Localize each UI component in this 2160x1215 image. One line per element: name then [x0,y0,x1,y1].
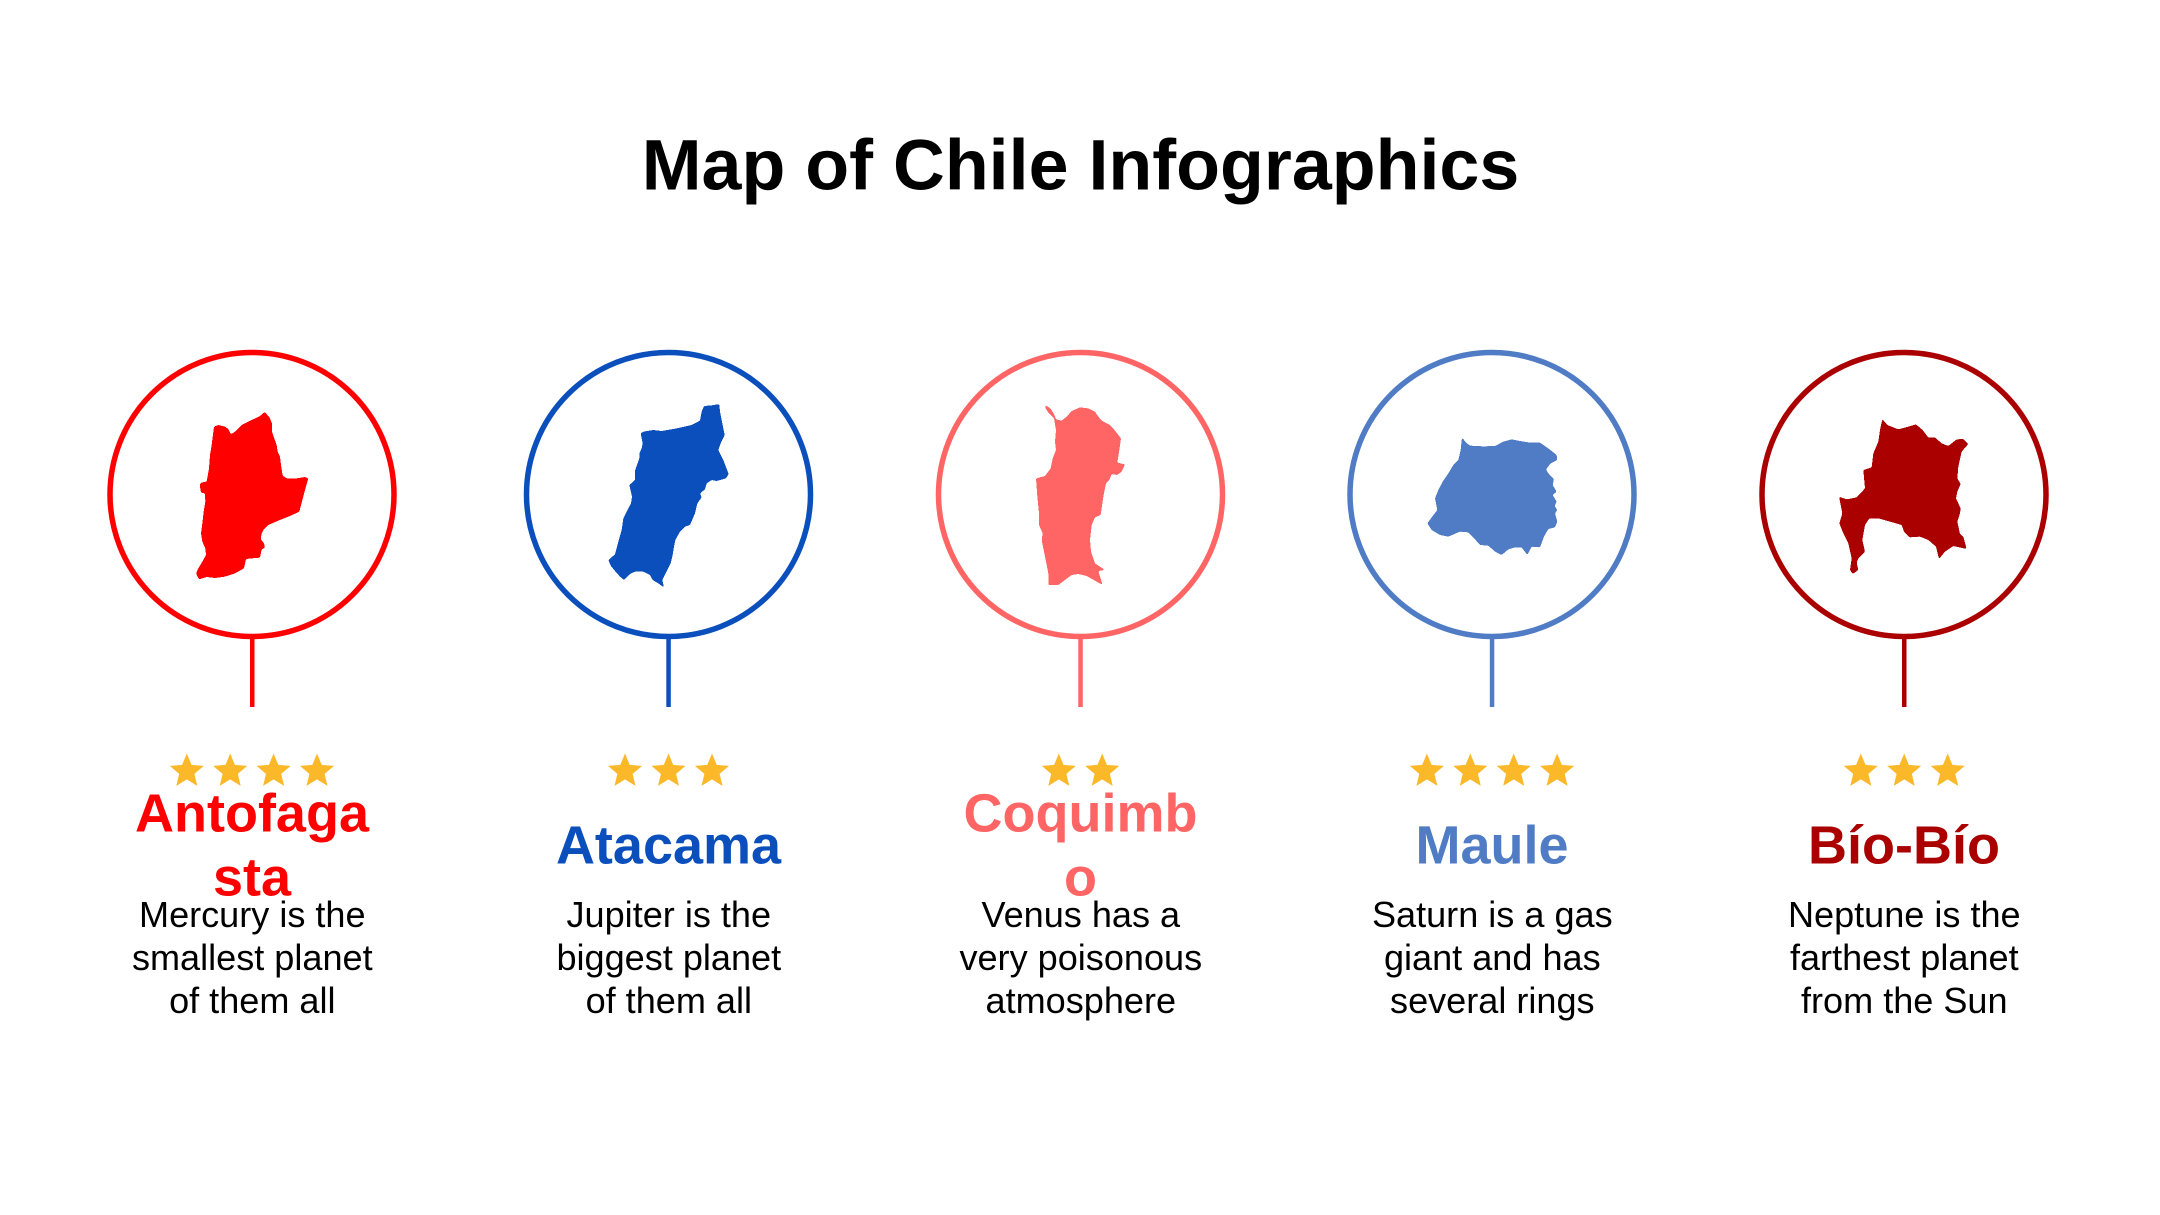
text block: Bío-Bío description: from the Sun [1801,980,2008,1021]
icon: Atacama circle [526,352,810,636]
heading: Antofagasta: sta [213,848,292,908]
icon: Coquimbo circle [938,352,1222,636]
rating: 4 stars [1410,754,1574,786]
text block: Maule description: several rings [1390,980,1595,1021]
text block: Coquimbo description: Venus has a [982,894,1181,935]
heading: Maule: Maule [1415,816,1569,876]
text block: Bío-Bío description: farthest planet [1790,937,2019,978]
connector line: Antofagasta [250,637,254,707]
rating: 2 stars [1042,754,1119,786]
panel: Maule [1350,352,1634,1021]
connector line: Bío-Bío [1902,637,1906,707]
panel: Bío-Bío [1762,352,2046,1021]
text block: Atacama description: biggest planet [556,937,781,978]
text block: Antofagasta description: smallest planet [132,937,373,978]
rating: 4 stars [170,754,334,786]
heading: Bío-Bío: Bío-Bío [1808,816,2000,876]
text block: Coquimbo description: very poisonous [959,937,1202,978]
rating: 3 stars [1844,754,1965,786]
icon: Antofagasta region map [196,412,308,579]
text block: Atacama description: Jupiter is the [567,894,771,935]
heading: Atacama: Atacama [556,816,782,876]
text block: Coquimbo description: atmosphere [986,980,1176,1021]
icon: Antofagasta circle [110,352,394,636]
text block: Maule description: Saturn is a gas [1372,894,1613,935]
icon: Atacama region map [608,404,729,588]
heading: Antofagasta: Antofaga [135,784,370,844]
icon: Maule region map [1427,437,1557,555]
text block: Antofagasta description: of them all [169,980,336,1021]
connector line: Atacama [666,637,671,707]
heading: Coquimbo: Coquimb [964,784,1197,844]
icon: Maule circle [1350,352,1634,636]
text block: Antofagasta description: Mercury is the [139,894,366,935]
connector line: Coquimbo [1078,637,1083,707]
panel: Coquimbo [938,352,1222,1021]
text block: Maule description: giant and has [1384,937,1601,978]
icon: Bío-Bío region map [1839,419,1968,574]
icon: Bío-Bío circle [1762,352,2046,636]
connector line: Maule [1490,637,1494,707]
heading: Coquimbo: o [1064,848,1097,908]
rating: 3 stars [608,754,729,786]
panel: Atacama [526,352,810,1021]
text block: Atacama description: of them all [586,980,752,1021]
title: Map of Chile Infographics [642,126,1519,206]
panel: Antofagasta [110,352,394,1021]
icon: Coquimbo region map [1036,405,1125,585]
text block: Bío-Bío description: Neptune is the [1788,894,2021,935]
